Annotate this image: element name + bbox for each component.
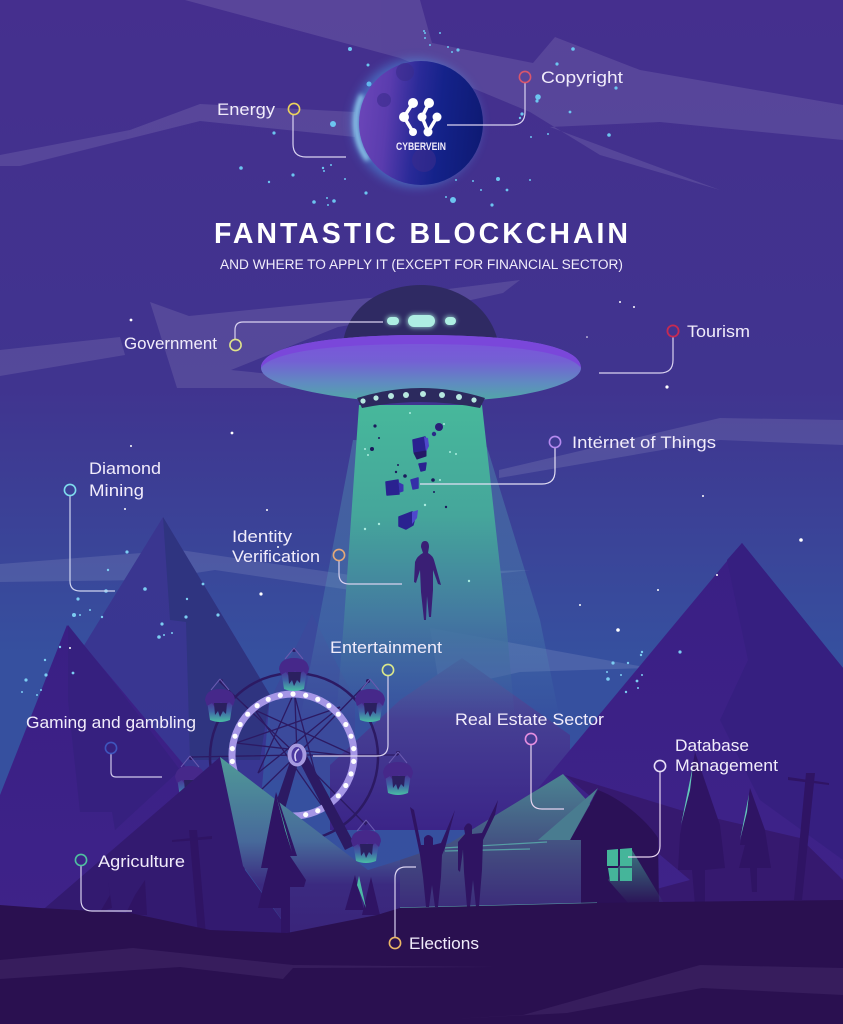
label: Entertainment [313, 639, 442, 756]
ground [0, 900, 843, 1024]
label: Energy [217, 101, 346, 157]
label: Elections [389, 867, 479, 953]
saucer collar [357, 388, 485, 408]
title: FANTASTIC BLOCKCHAIN [214, 218, 628, 250]
stars and particles: upper [239, 30, 618, 207]
icon: glowing window [607, 848, 632, 881]
label: Gaming and gambling [26, 714, 196, 777]
label: Internet of Things: Internet of Things [572, 434, 716, 452]
planet [352, 59, 483, 187]
subtitle: AND WHERE TO APPLY IT (EXCEPT FOR FINANCIAL SECTOR) [220, 257, 623, 272]
label: Elections: Elections [409, 935, 479, 953]
label: Database Management: Management [675, 757, 778, 775]
label: Database Management: Database [675, 737, 749, 755]
label: Government: Government [124, 335, 217, 353]
fence lines [400, 842, 597, 908]
label: Government [124, 322, 383, 353]
ferris wheel gondolas [175, 648, 413, 863]
label: Copyright [447, 69, 623, 125]
distant mountains [75, 517, 570, 830]
label: Gaming and gambling: Gaming and gambling [26, 714, 196, 732]
pine trees [100, 752, 771, 935]
label: Tourism: Tourism [687, 323, 750, 341]
label: Database Management [628, 737, 778, 857]
dome lights [386, 314, 456, 328]
logo wordmark: CYBERVEIN [396, 141, 446, 153]
label: Diamond Mining: Mining [89, 482, 144, 500]
label: Internet of Things [420, 434, 716, 484]
utility poles [172, 773, 829, 935]
stars and particles: lower [21, 550, 682, 696]
label: Copyright: Copyright [541, 69, 623, 87]
label: Diamond Mining: Diamond [89, 460, 161, 478]
light beam of the UFO [300, 405, 560, 720]
label: Real Estate Sector [455, 711, 605, 809]
abducted person silhouette [414, 541, 441, 620]
label: Identity Verification: Identity [232, 528, 293, 546]
label: Agriculture [75, 853, 185, 911]
right mountain [520, 543, 843, 900]
saucer dome [343, 285, 498, 342]
label: Diamond Mining [64, 460, 161, 591]
label: Real Estate Sector: Real Estate Sector [455, 711, 605, 729]
sky light streaks [0, 0, 843, 690]
ferris wheel [189, 648, 400, 850]
white stars [69, 301, 803, 649]
floating rocks [364, 412, 470, 582]
label: Energy: Energy [217, 101, 276, 119]
label: Entertainment: Entertainment [330, 639, 442, 657]
label: Identity Verification: Verification [232, 548, 320, 566]
house [538, 788, 665, 905]
cheering people [410, 800, 498, 907]
foreground hills [0, 757, 843, 945]
left mountain [0, 625, 240, 925]
icon: Cybervein logo [399, 98, 442, 136]
saucer disc [261, 335, 581, 400]
label: Agriculture: Agriculture [98, 853, 185, 871]
label: Identity Verification [232, 528, 402, 584]
label: Tourism [599, 323, 750, 373]
